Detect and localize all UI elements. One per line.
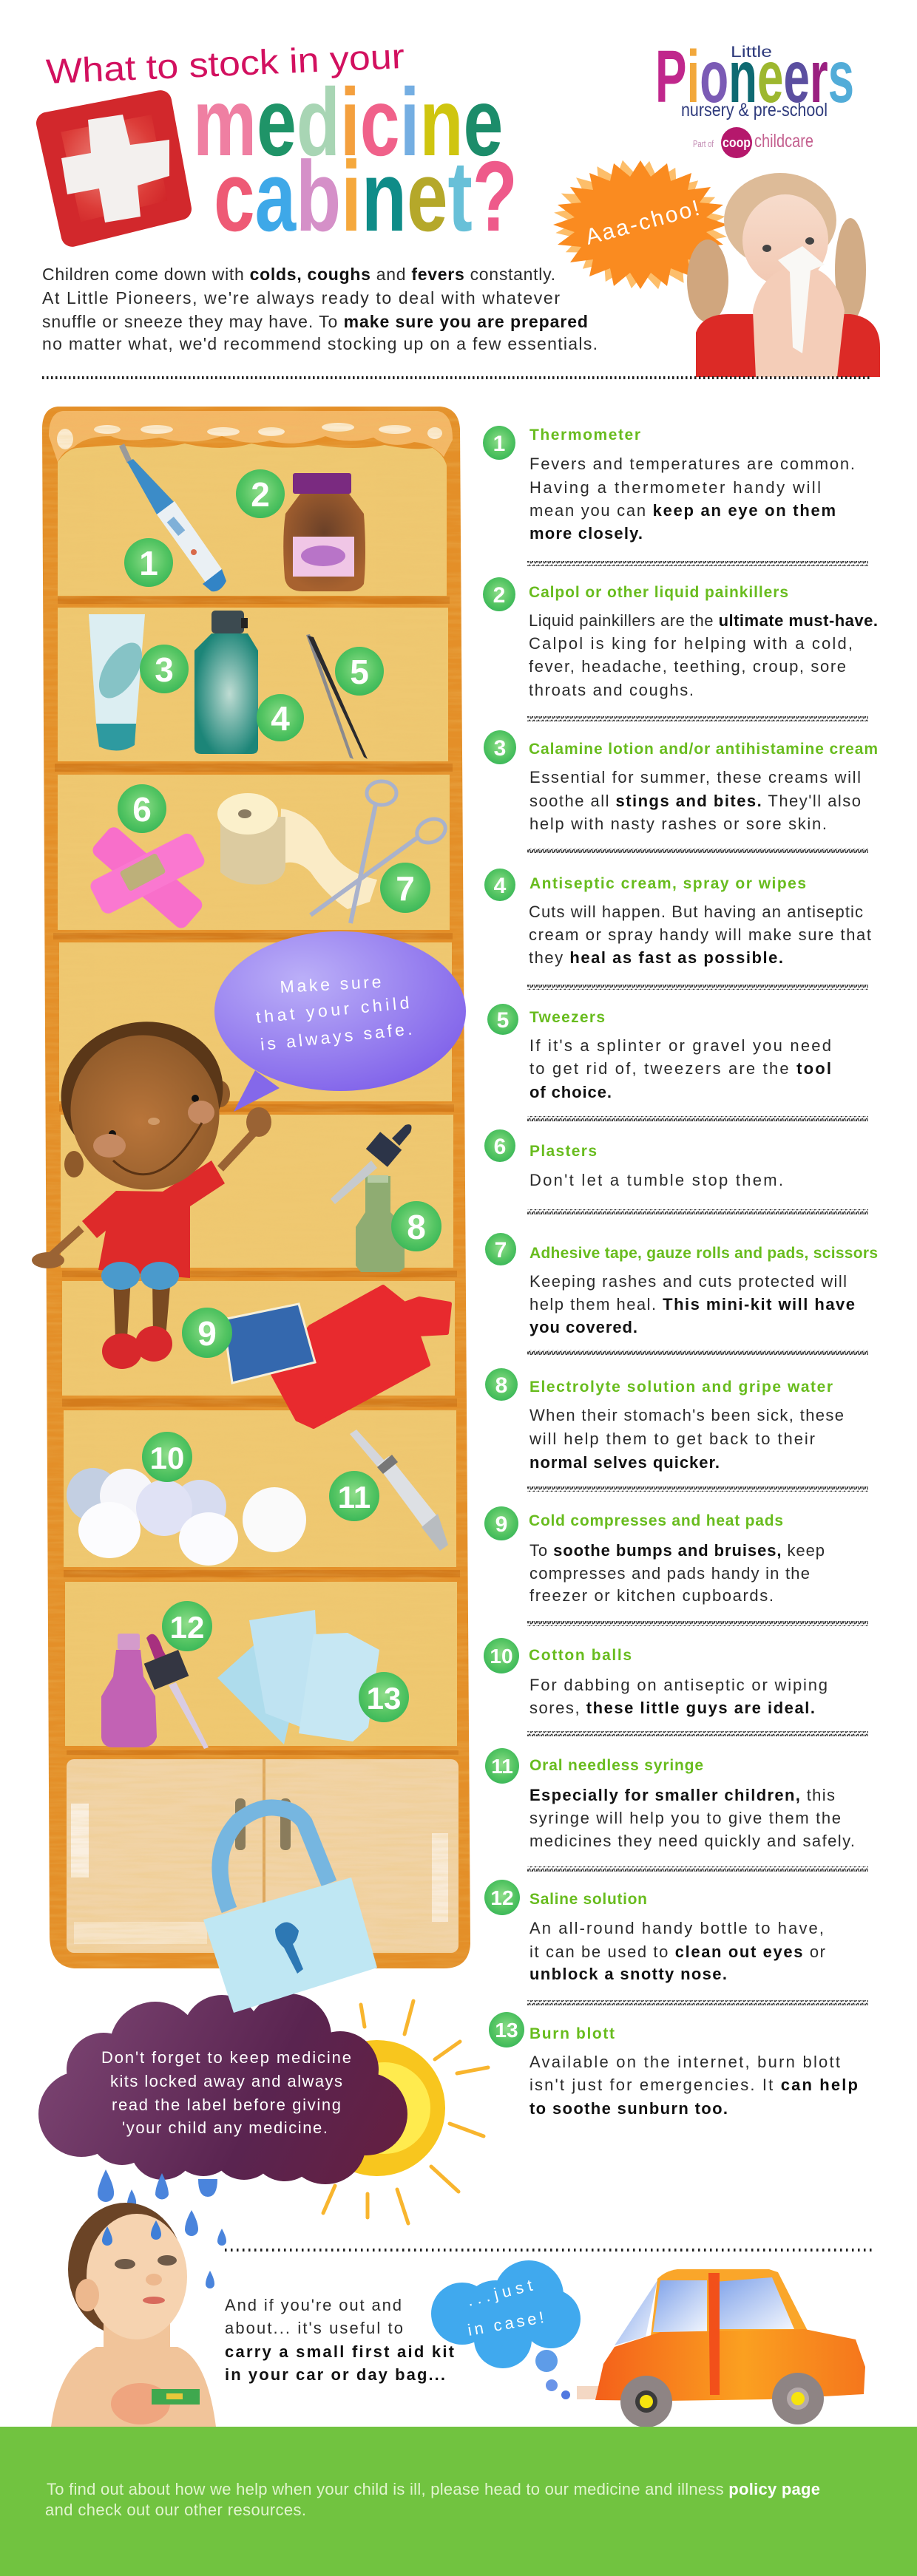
list item 7: adhesive tape: you covered. [529, 1318, 637, 1336]
icon: red first aid card with white cross [47, 101, 180, 236]
list item 2: calpol: fever, headache, teething, croup, sore [529, 657, 846, 676]
logo: little pioneers: Little [731, 44, 772, 61]
list item 2: calpol: 2 [493, 583, 505, 608]
list item 5: tweezers: 5 [497, 1008, 509, 1033]
title word: cabinet?: cabinet? [214, 140, 518, 253]
list item 1: thermometer: Fevers and temperatures are common. [529, 455, 855, 473]
logo: little pioneers: Part of [693, 138, 714, 149]
intro text [42, 265, 598, 353]
icon: tweezers [306, 634, 368, 759]
speech bubble: make sure your child is safe: is always safe. [260, 1019, 413, 1054]
text: first aid kit advice: about... it's useful to [225, 2319, 403, 2337]
number badge 3 [140, 645, 189, 693]
list item 4: antiseptic: 4 [494, 874, 507, 898]
list item 4: antiseptic: they heal as fast as possible. [529, 948, 783, 967]
number badge 10 [142, 1432, 192, 1482]
logo: little pioneers [655, 35, 854, 158]
list item 9: cold compresses: To soothe bumps and bruises, keep [529, 1541, 825, 1560]
icon: sun [309, 2001, 488, 2223]
title: what to stock in your: What to stock in your [45, 36, 405, 91]
icon: rain drops [98, 2169, 226, 2288]
icon: door latches [235, 1798, 291, 1850]
cabinet shelf edges [53, 597, 460, 1755]
illustration: boy sitting on shelf [32, 1007, 271, 1369]
list item 8: electrolyte: 8 [495, 1373, 507, 1398]
list item 4: antiseptic: Cuts will happen. But having an antiseptic [529, 903, 863, 921]
list item 7: adhesive tape: help them heal. This mini-kit will have [529, 1295, 855, 1314]
number badge 9 [182, 1308, 232, 1358]
cabinet doors [67, 1759, 458, 1953]
list item 8: electrolyte [485, 1368, 844, 1472]
list item 7: adhesive tape: Keeping rashes and cuts protected will [529, 1272, 847, 1291]
number badge 8 [391, 1201, 441, 1251]
number badge 13: 13 [367, 1681, 401, 1716]
list item 3: calamine: 3 [494, 736, 506, 761]
photo: baby looking up [51, 2203, 216, 2427]
icon: oral syringe [350, 1430, 448, 1551]
number badge 3: 3 [155, 650, 174, 689]
list item 3: calamine: Essential for summer, these creams will [529, 768, 861, 786]
list item 10: cotton balls: sores, these little guys are ideal. [529, 1699, 815, 1717]
list item 5: tweezers [487, 1004, 831, 1101]
icon: red hot water bottle [273, 1287, 450, 1427]
list item 5: tweezers: of choice. [529, 1083, 612, 1101]
logo: little pioneers: nursery & pre-school [681, 100, 828, 120]
list item 11: syringe: medicines they need quickly and safely. [529, 1832, 855, 1850]
list item 12: saline: 12 [490, 1886, 514, 1909]
list item 9: cold compresses: 9 [495, 1512, 507, 1537]
list item 9: cold compresses: freezer or kitchen cupboards. [529, 1586, 774, 1605]
list item 6: plasters: Don't let a tumble stop them. [529, 1171, 783, 1189]
list item 10: cotton balls [484, 1638, 828, 1717]
number badge 2 [236, 469, 285, 518]
thought cloud: just in case [431, 2260, 581, 2399]
speech bubble: make sure your child is safe [214, 931, 466, 1112]
list item 13: burn blott: isn't just for emergencies. It can help [529, 2076, 858, 2094]
list item 13: burn blott: Burn blott [529, 2025, 615, 2042]
list item 10: cotton balls: Cotton balls [529, 1647, 632, 1664]
intro text: no matter what, we'd recommend stocking up on a few essentials. [42, 334, 598, 353]
icon: scissors [311, 781, 449, 923]
number badge 4: 4 [271, 699, 290, 738]
cabinet frame [42, 407, 470, 1968]
cloud: safety reminder: read the label before giving [112, 2096, 341, 2114]
illustration: orange car [577, 2269, 865, 2427]
icon: pink plasters [88, 824, 207, 931]
icon: gauze roll [217, 793, 377, 909]
list item 3: calamine [484, 730, 878, 833]
icon: padlock [203, 1807, 377, 2013]
text: first aid kit advice: And if you're out and [225, 2296, 402, 2314]
footer text [45, 2480, 820, 2519]
list item 11: syringe: 11 [491, 1755, 513, 1778]
speech bubble: make sure your child is safe: Make sure [280, 972, 382, 996]
text: first aid kit advice: in your car or day bag... [225, 2365, 445, 2384]
callout: aaa-choo burst: Aaa-choo! [583, 196, 702, 250]
list item 8: electrolyte: normal selves quicker. [529, 1453, 720, 1472]
list item 4: antiseptic [484, 869, 871, 967]
panel: header [42, 35, 880, 377]
list item 7: adhesive tape [485, 1233, 878, 1336]
number badge 2: 2 [251, 475, 270, 514]
list item 6: plasters: Plasters [529, 1143, 597, 1160]
list item 5: tweezers: If it's a splinter or gravel you need [529, 1036, 831, 1055]
logo: little pioneers: childcare [754, 131, 813, 152]
number badge 10: 10 [150, 1441, 184, 1475]
number badge 11: 11 [338, 1480, 370, 1515]
text: first aid kit advice: carry a small first aid kit [225, 2342, 455, 2361]
list item 9: cold compresses [484, 1506, 825, 1605]
number badge 1: 1 [139, 544, 158, 582]
list item 9: cold compresses: Cold compresses and heat pads [529, 1512, 783, 1529]
list item 2: calpol: Liquid painkillers are the ultimate must-have. [529, 611, 878, 630]
number badge 4 [257, 694, 304, 741]
speech bubble: make sure your child is safe: that your child [255, 993, 410, 1027]
footer text: To find out about how we help when your child is ill, please head to our medicine and illness policy page [47, 2480, 820, 2498]
number badge 7 [380, 863, 430, 913]
footer band [0, 2427, 917, 2576]
cabinet shelves [58, 444, 457, 1746]
list item 9: cold compresses: compresses and pads handy in the [529, 1564, 810, 1583]
list item 12: saline: it can be used to clean out eyes or [529, 1943, 825, 1961]
list item 1: thermometer: Having a thermometer handy will [529, 478, 821, 497]
list item 13: burn blott: Available on the internet, burn blott [529, 2053, 840, 2071]
number badge 1 [124, 538, 173, 587]
cloud: safety reminder: kits locked away and always [110, 2072, 342, 2090]
number badge 11 [329, 1471, 379, 1521]
list item 5: tweezers: Tweezers [529, 1009, 605, 1026]
number badge 12 [162, 1601, 212, 1651]
list item 2: calpol [483, 577, 878, 699]
panel: numbered list [483, 426, 878, 2118]
number badge 6 [118, 784, 166, 833]
list item 4: antiseptic: Antiseptic cream, spray or wipes [529, 875, 806, 892]
list item 11: syringe: syringe will help you to give them the [529, 1809, 841, 1827]
list item 8: electrolyte: Electrolyte solution and gripe water [529, 1379, 833, 1396]
list item 11: syringe: Especially for smaller children, this [529, 1786, 835, 1804]
icon: cream tube [89, 614, 151, 751]
thought cloud: just in case: ...just [465, 2276, 535, 2310]
list item 7: adhesive tape: Adhesive tape, gauze rolls and pads, scissors [529, 1245, 878, 1262]
intro text: Children come down with colds, coughs and fevers constantly. [42, 265, 555, 284]
list item 1: thermometer: Thermometer [529, 426, 640, 444]
list item 6: plasters [484, 1129, 783, 1189]
list item 1: thermometer: 1 [493, 432, 505, 456]
number badge 7: 7 [396, 869, 415, 908]
list item 13: burn blott: 13 [495, 2019, 518, 2042]
number badge 12: 12 [170, 1610, 204, 1645]
list item 3: calamine: help with nasty rashes or sore skin. [529, 815, 827, 833]
text: first aid kit advice [225, 2296, 455, 2384]
list item 13: burn blott: to soothe sunburn too. [529, 2099, 728, 2118]
intro text: At Little Pioneers, we're always ready to deal with whatever [42, 288, 560, 307]
list item 10: cotton balls: 10 [490, 1645, 513, 1668]
list item 12: saline: unblock a snotty nose. [529, 1965, 727, 1983]
panel: cabinet illustration [32, 407, 471, 1970]
list item 3: calamine: soothe all stings and bites. They'll also [529, 792, 861, 810]
icon: drops on baby [102, 2220, 161, 2246]
number badge 8: 8 [407, 1208, 426, 1246]
list item 4: antiseptic: cream or spray handy will make sure that [529, 925, 871, 944]
cloud: safety reminder [38, 1994, 407, 2184]
icon: antiseptic bottle [194, 611, 258, 754]
cloud: safety reminder: 'your child any medicine. [122, 2118, 328, 2137]
icon: brown medicine jar [283, 473, 365, 591]
list item 11: syringe [485, 1748, 855, 1850]
icon: dropper bottle green [331, 1124, 411, 1272]
number badge 6: 6 [132, 790, 152, 829]
number badge 5 [335, 647, 384, 696]
list item 8: electrolyte: When their stomach's been sick, these [529, 1406, 844, 1424]
icon: blue cold compress [223, 1304, 315, 1383]
list item 2: calpol: throats and coughs. [529, 681, 694, 699]
logo: little pioneers: coop [723, 135, 751, 150]
cloud: safety reminder: Don't forget to keep medicine [101, 2048, 351, 2067]
list item 8: electrolyte: will help them to get back to their [529, 1430, 815, 1448]
callout: aaa-choo burst [545, 149, 736, 301]
list item 7: adhesive tape: 7 [495, 1238, 507, 1262]
list item 12: saline: An all-round handy bottle to have, [529, 1919, 824, 1937]
photo: girl with tissue [687, 173, 880, 377]
list item 2: calpol: Calpol is king for helping with a cold, [529, 634, 853, 653]
title word: medicine: medicine [193, 69, 503, 176]
icon: saline bottle purple [101, 1634, 209, 1749]
icon: burn blott pads [217, 1610, 379, 1744]
number badge 13 [359, 1672, 409, 1722]
list item 3: calamine: Calamine lotion and/or antihistamine cream [529, 741, 878, 758]
list item 1: thermometer: mean you can keep an eye on them [529, 501, 836, 520]
intro text: snuffle or sneeze they may have. To make sure you are prepared [42, 312, 588, 331]
list item 1: thermometer: more closely. [529, 524, 643, 543]
list item 12: saline [484, 1880, 825, 1983]
icon: thermometer [119, 444, 226, 591]
list item 2: calpol: Calpol or other liquid painkillers [529, 584, 788, 601]
list item 5: tweezers: to get rid of, tweezers are the tool [529, 1059, 831, 1078]
list item 11: syringe: Oral needless syringe [529, 1757, 703, 1774]
list item 13: burn blott [489, 2012, 858, 2118]
number badge 9: 9 [197, 1314, 217, 1353]
list item 12: saline: Saline solution [529, 1891, 647, 1908]
list item 10: cotton balls: For dabbing on antiseptic or wiping [529, 1676, 828, 1694]
list item 1: thermometer [483, 426, 855, 543]
list item 6: plasters: 6 [494, 1135, 506, 1159]
icon: cotton balls [67, 1468, 306, 1566]
thought cloud: just in case: in case! [467, 2308, 545, 2339]
footer text: and check out our other resources. [45, 2501, 306, 2519]
logo: little pioneers: Pioneers [655, 35, 854, 118]
number badge 5: 5 [350, 653, 369, 691]
cabinet top crust [49, 411, 453, 462]
